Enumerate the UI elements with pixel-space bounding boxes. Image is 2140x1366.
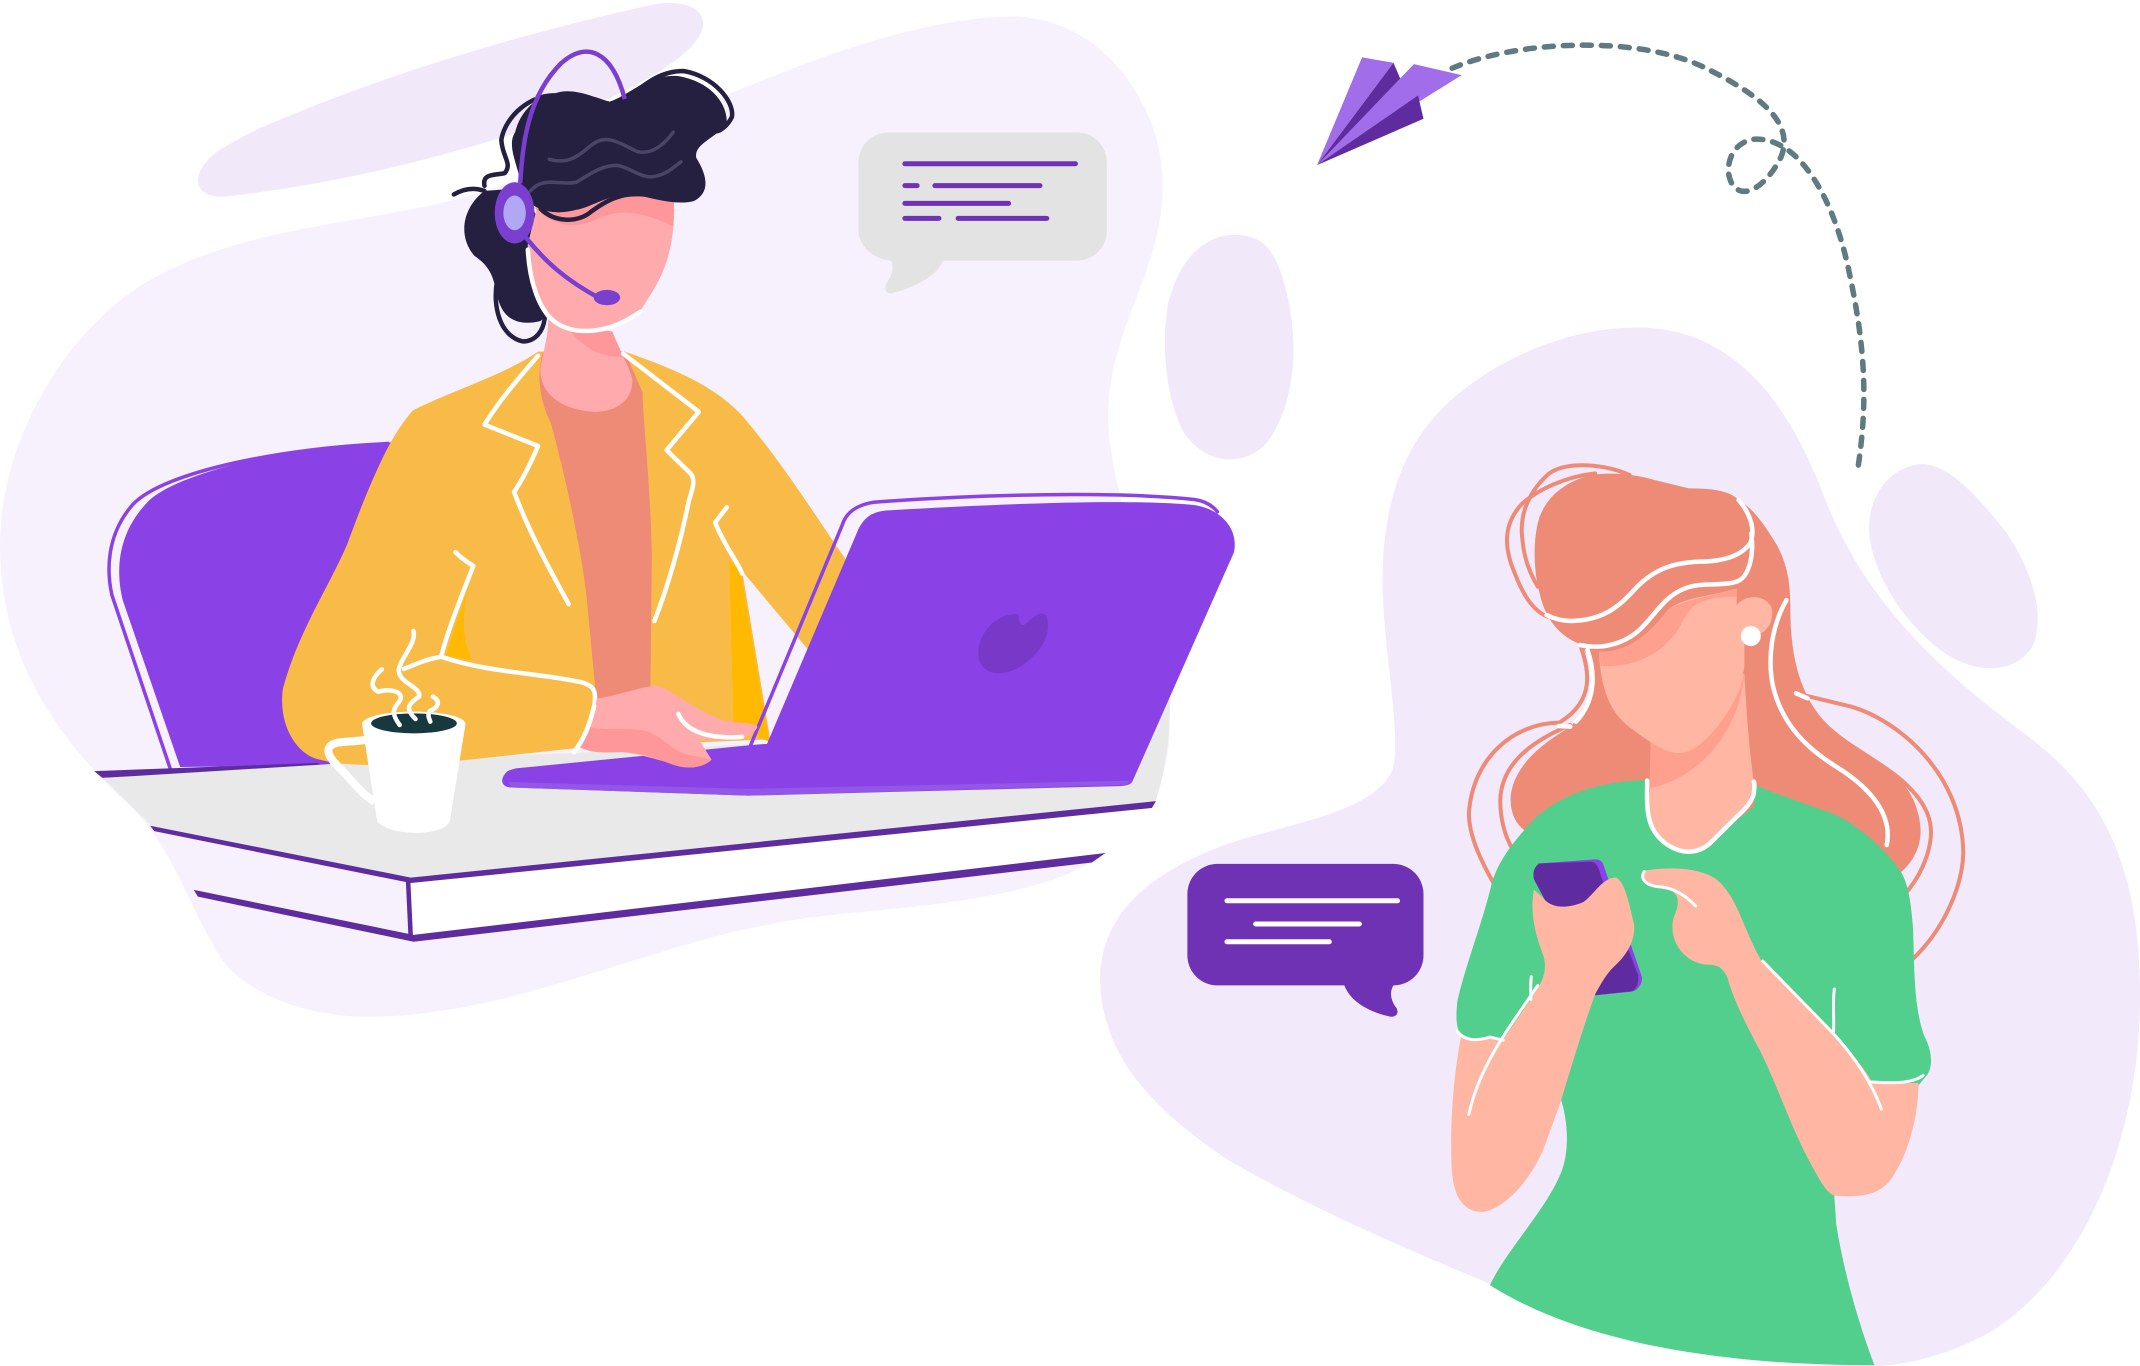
icon: paper plane: [1317, 57, 1462, 165]
headset: [495, 52, 625, 305]
speech bubble: grey agent message: [858, 132, 1107, 293]
customer: hair: [1469, 465, 1963, 959]
earring: [1741, 626, 1761, 646]
left arm holding phone: [1451, 877, 1634, 1212]
hair loop outline: [496, 280, 545, 341]
jacket: [282, 352, 847, 765]
customer: arms and phone: [1451, 859, 1923, 1212]
chair: [94, 442, 409, 778]
agent: hair back and body: [282, 52, 847, 765]
right arm: [1643, 868, 1918, 1196]
hair top left outline: [484, 95, 556, 186]
hair and neckline lines: [1547, 500, 1888, 852]
neck: [1647, 673, 1754, 853]
hair outlines: [1469, 465, 1963, 959]
coffee cup: [328, 631, 466, 833]
face shadow: [536, 193, 674, 227]
speech bubble: purple customer message: [1187, 864, 1423, 1017]
jacket inner shade: [729, 561, 769, 742]
pocket shade: [446, 581, 472, 660]
blob: large right lavender: [1100, 328, 2140, 1366]
face: [528, 193, 674, 330]
hair fringe line: [541, 194, 658, 220]
neck shadow: [571, 331, 623, 357]
phone: [1533, 859, 1642, 995]
jacket lapels and seams: [404, 354, 742, 752]
hair waves: [530, 132, 681, 191]
hair strand left: [454, 189, 484, 194]
neck: [540, 318, 632, 412]
hair front: [512, 76, 727, 212]
forehead shadow: [1599, 588, 1737, 666]
face outline: [528, 250, 640, 331]
arrow: dashed flight path: [1452, 45, 1864, 471]
hair back: [464, 188, 546, 323]
desk: [102, 696, 1170, 942]
neck shadow: [1649, 673, 1744, 788]
shirt: [539, 352, 652, 704]
hair fill: [1511, 474, 1921, 875]
blob: small right: [1869, 464, 2038, 668]
face: [1599, 588, 1744, 753]
blob: small middle: [1165, 235, 1293, 459]
customer: green shirt: [1456, 780, 1931, 1365]
blob: large left lavender: [0, 16, 1170, 1017]
customer: face and neck: [1547, 500, 1888, 853]
blob: top left swoosh: [198, 3, 703, 197]
arm and sleeve lines: [1457, 872, 1923, 1114]
hair top right outline: [622, 71, 732, 131]
agent hand: [574, 686, 757, 768]
laptop: [502, 495, 1235, 796]
ear: [1737, 597, 1772, 637]
